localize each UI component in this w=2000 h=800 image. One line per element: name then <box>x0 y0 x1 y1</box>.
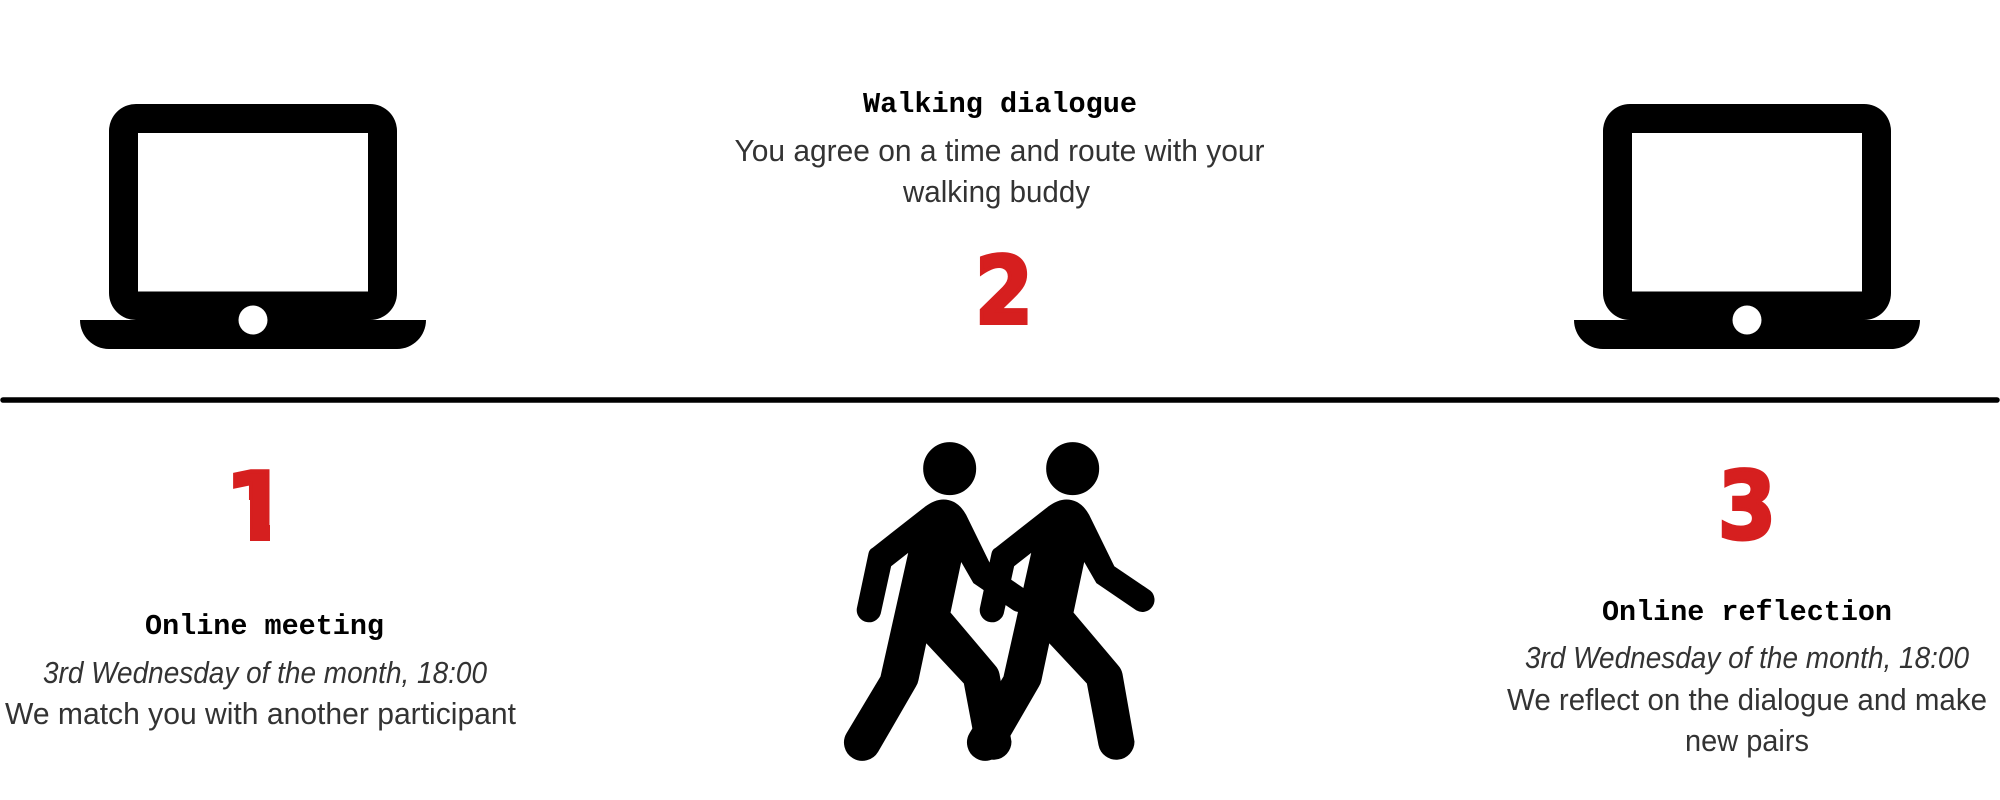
panel: step 1 online meeting <box>5 104 516 731</box>
heading: online reflection: Online reflection <box>1602 596 1892 629</box>
heading: online meeting: Online meeting <box>145 610 384 643</box>
number 3: 3 <box>1718 452 1776 560</box>
number 1: 1 <box>225 453 289 561</box>
icon: two walking people <box>844 443 1154 760</box>
description text: You agree on a time and route with your <box>734 133 1264 168</box>
icon: laptop right <box>1574 104 1920 349</box>
description text: We reflect on the dialogue and make <box>1507 682 1987 717</box>
panel: step 2 walking dialogue <box>734 88 1264 760</box>
description text <box>734 133 1264 209</box>
number 2: 2 <box>975 237 1033 345</box>
description text: walking buddy <box>902 174 1090 209</box>
description text: new pairs <box>1685 723 1809 758</box>
panel: step 3 online reflection <box>1507 104 1987 758</box>
description text <box>1507 682 1987 758</box>
schedule text: 3rd Wednesday of the month, 18:00 <box>43 655 487 690</box>
heading: walking dialogue: Walking dialogue <box>863 88 1137 121</box>
icon: laptop left <box>80 104 426 349</box>
description text: We match you with another participant <box>5 696 516 731</box>
horizontal divider line <box>3 397 1997 403</box>
